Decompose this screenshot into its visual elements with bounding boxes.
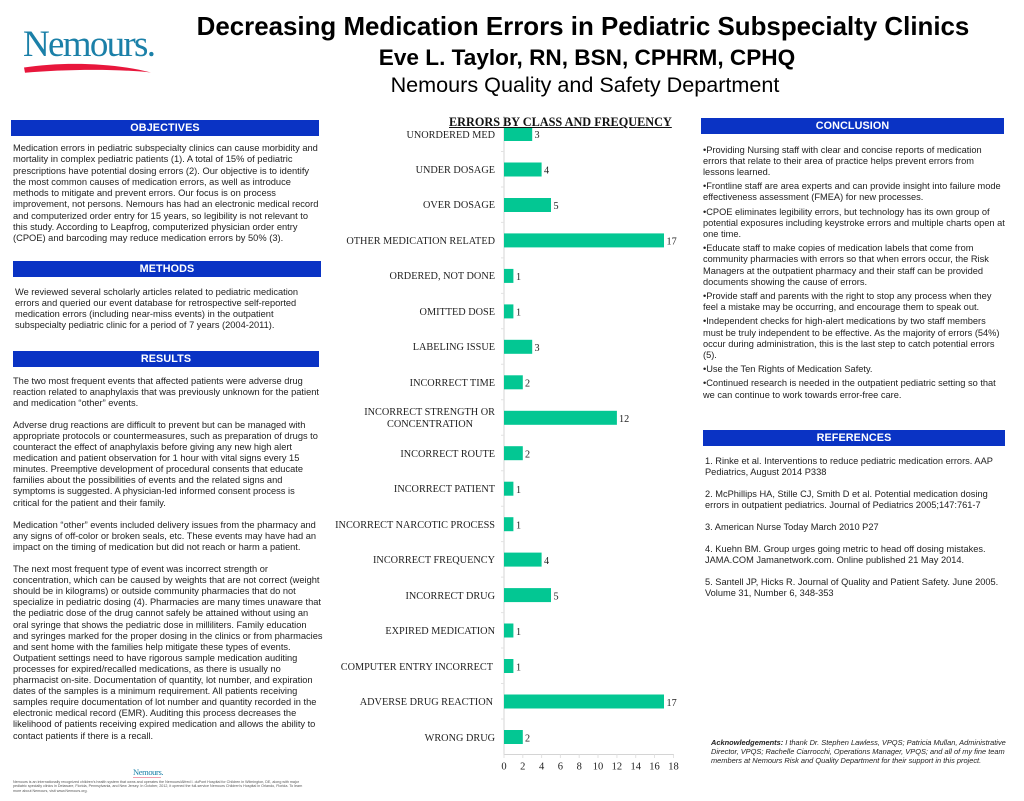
text: results: contact patients if there is a recall. xyxy=(13,730,153,740)
category labels: INCORRECT FREQUENCY xyxy=(373,555,496,566)
logo: Nemours: Nemours. xyxy=(23,24,154,65)
heading: conclusion xyxy=(701,118,1004,134)
text: results: specialize in pediatric dosing (4). Pharmacies are many times unaware that xyxy=(13,597,321,607)
text: methods: subspecialty pediatric clinic for a period of 7 years (2004-2011). xyxy=(15,320,274,330)
text: footer: pediatric specialty clinics in Delaware, Florida, Pennsylvania, and New Jersey. In October, 2012, it opened the full-service Nemours Children's Hospital in Orlando, Florida. To learn xyxy=(13,784,302,788)
category labels: WRONG DRUG xyxy=(425,733,496,744)
text: conclusion: •CPOE eliminates legibility errors, but technology has its own group of xyxy=(703,207,990,217)
text: conclusion: (5). xyxy=(703,350,717,360)
text: objectives: and computerized order entry for 15 years, so legibility is not relevant to xyxy=(13,211,308,221)
text: conclusion: occur during administration, this is the last step to catch potential errors xyxy=(703,339,995,349)
text: results: families about the possibilities of events and the related signs and xyxy=(13,475,282,485)
text: results: critical for the patient and their family. xyxy=(13,498,166,508)
text: conclusion: one time. xyxy=(703,229,741,239)
heading: results xyxy=(13,351,319,367)
text: acknowledgements: members at Nemours Risk and Quality Department for their support in this project. xyxy=(711,756,981,765)
category labels: INCORRECT DRUG xyxy=(405,591,496,602)
text: objectives: the most common causes of medication errors, as well as introduce xyxy=(13,177,291,187)
value labels: 1 xyxy=(516,662,521,674)
text: results: The next most frequent type of event was incorrect strength or xyxy=(13,564,268,574)
x axis labels xyxy=(501,762,679,772)
department: Nemours Quality and Safety Department xyxy=(391,72,779,97)
text: conclusion: lessons learned. xyxy=(703,167,770,177)
value labels: 1 xyxy=(516,485,521,496)
category labels: INCORRECT NARCOTIC PROCESS xyxy=(335,520,495,531)
text: references: 2. McPhillips HA, Stille CJ, Smith D et al. Potential medication dosing xyxy=(705,488,988,498)
category labels: CONCENTRATION xyxy=(387,419,474,430)
category labels: OMITTED DOSE xyxy=(420,307,495,318)
text: methods xyxy=(15,287,298,330)
heading: references: REFERENCES xyxy=(817,432,891,444)
text: results: concentration, which can be caused by weights that are not correct (weight xyxy=(13,575,319,585)
text: objectives: mortality in complex pediatric patients (1). A total of 15% of pediatric xyxy=(13,154,293,164)
text: results: and medication “other” events. xyxy=(13,398,138,408)
x axis labels: 10 xyxy=(593,762,603,772)
text: footer xyxy=(13,780,302,793)
text: results: likelihood of patients receiving expired medication and allows the ability to xyxy=(13,719,315,729)
author: Eve L. Taylor, RN, BSN, CPHRM, CPHQ xyxy=(379,45,795,70)
value labels: 3 xyxy=(534,130,540,141)
text: results: counteract the effect of anaphylaxis before giving any new high alert xyxy=(13,442,292,452)
text: conclusion: •Continued research is needed in the outpatient pediatric setting so that xyxy=(703,378,996,388)
text: results: symptoms is suggested. A physician-led informed consent process is xyxy=(13,486,295,496)
value labels: 17 xyxy=(666,698,677,709)
text: references xyxy=(705,456,998,598)
text: results: minutes. Preemptive development of procedural consents that educate xyxy=(13,464,303,474)
value labels: 17 xyxy=(666,236,677,248)
category labels: OTHER MEDICATION RELATED xyxy=(346,236,495,247)
text: objectives: improvement, not persons. Nemours has had an electronic medical record xyxy=(13,199,318,209)
x axis labels: 12 xyxy=(612,762,622,772)
bar chart: errors by class and frequency xyxy=(335,115,679,772)
text: results: any signs of off-color or broken seals, etc. These events may have had an xyxy=(13,531,316,541)
category labels: UNORDERED MED xyxy=(406,130,495,141)
category labels: ORDERED, NOT DONE xyxy=(390,271,495,282)
chart title: ERRORS BY CLASS AND FREQUENCY xyxy=(449,115,672,129)
category labels: EXPIRED MEDICATION xyxy=(385,626,496,637)
x axis labels: 8 xyxy=(577,762,582,772)
value labels: 5 xyxy=(554,201,559,212)
value labels: 2 xyxy=(525,734,530,744)
text: results: should be in kilograms) or outside community pharmacies that do not xyxy=(13,586,296,596)
value labels xyxy=(516,130,677,744)
text: objectives: prescriptions have potential dosing errors (2). Our objective is to identify xyxy=(13,166,309,176)
text: references: JAMA.COM Jamanetwork.com. Online published 21 May 2014. xyxy=(705,554,964,564)
value labels: 12 xyxy=(619,414,629,425)
x axis labels: 18 xyxy=(668,762,679,772)
text: conclusion: effectiveness assessment (FMEA) for new processes. xyxy=(703,192,923,202)
text: acknowledgements: Acknowledgements: I thank Dr. Stephen Lawless, VPQS; Patricia Mullan, Administrative xyxy=(711,738,1006,747)
x axis labels: 6 xyxy=(558,762,563,772)
category labels xyxy=(335,130,496,744)
title: Decreasing Medication Errors in Pediatric Subspecialty Clinics xyxy=(197,13,969,41)
heading: references xyxy=(703,430,1005,446)
text: references: 4. Kuehn BM. Group urges going metric to head off dosing mistakes. xyxy=(705,544,986,554)
text: objectives: methods to mitigate and prevent errors. Our focus is on process xyxy=(13,188,276,198)
text: conclusion: Managers at the outpatient pharmacy and their staff can be provided xyxy=(703,266,983,276)
x axis labels: 0 xyxy=(501,762,507,772)
category labels: LABELING ISSUE xyxy=(413,342,495,353)
text: objectives xyxy=(13,143,318,243)
text: results: impact on the timing of medication but did not reach or harm a patient. xyxy=(13,542,300,552)
text: results: Outpatient settings need to have rigorous sample medication auditing xyxy=(13,653,297,663)
value labels: 5 xyxy=(554,592,559,602)
text: results: oral syringe that shows the pediatric dose in milliliters. Family education xyxy=(13,620,307,630)
text: results: reaction related to anaphylaxis that was previously unknown for the patient xyxy=(13,387,319,397)
x axis labels: 14 xyxy=(630,762,642,772)
text: results: Medication “other” events included delivery issues from the pharmacy and xyxy=(13,520,316,530)
text: conclusion: •Frontline staff are area experts and can provide insight into failure mode xyxy=(703,181,1001,191)
category labels: ADVERSE DRUG REACTION xyxy=(360,697,494,708)
heading: methods: METHODS xyxy=(140,263,194,275)
text: references: 3. American Nurse Today March 2010 P27 xyxy=(705,522,879,532)
text: conclusion: •Provide staff and parents with the right to stop any process when they xyxy=(703,291,991,301)
text: conclusion: feel a mistake may be occurring, and encourage them to speak out. xyxy=(703,302,979,312)
text: conclusion: must be truly independent to be effective. As the majority of errors (54%) xyxy=(703,328,1000,338)
heading: conclusion: CONCLUSION xyxy=(816,120,889,132)
value labels: 1 xyxy=(516,308,521,318)
text: conclusion: •Educate staff to make copies of medication labels that come from xyxy=(703,243,973,253)
x axis labels: 2 xyxy=(520,762,525,772)
text: objectives: this study. According to Leapfrog, computerized physician order entry xyxy=(13,222,298,232)
text: results: and syringes marked for the proper dosing in the clinics or from pharmacies xyxy=(13,631,323,641)
text: methods: We reviewed several scholarly articles related to pediatric medication xyxy=(15,287,298,297)
text: conclusion: community pharmacies with errors so that when errors occur, the Risk xyxy=(703,254,989,264)
text: results: the pediatric dose of the drug cannot safely be attained without using an xyxy=(13,608,308,618)
text: results: dates of the samples is a minimum requirement. All patients receiving xyxy=(13,686,297,696)
text: references: Pediatrics, August 2014 P338 xyxy=(705,466,826,476)
value labels: 4 xyxy=(544,166,549,176)
text: references: 1. Rinke et al. Interventions to reduce pediatric medication errors. AAP xyxy=(705,456,993,466)
value labels: 3 xyxy=(534,343,540,354)
text: objectives: (CPOE) and barcoding may reduce medication errors by 50% (3). xyxy=(13,233,283,243)
value labels: 1 xyxy=(516,520,521,532)
value labels: 1 xyxy=(516,627,521,638)
category labels: INCORRECT STRENGTH OR xyxy=(364,407,495,418)
text: results: electronic medical record (EMR). Auditing this process decreases the xyxy=(13,708,296,718)
heading: methods xyxy=(13,261,321,277)
bars xyxy=(504,127,664,744)
category labels: INCORRECT TIME xyxy=(410,378,495,389)
text: results: medication and patient observation for 1 hour with vital signs every 15 xyxy=(13,453,299,463)
text: footer: Nemours is an internationally recognized children's health system that owns and operates the Nemours/Alfred I. duPont Hospital for Children in Wilmington, DE, along with major xyxy=(13,780,299,784)
text: conclusion: •Use the Ten Rights of Medication Safety. xyxy=(703,364,872,374)
category labels: OVER DOSAGE xyxy=(423,200,495,211)
heading: results: RESULTS xyxy=(141,353,191,365)
value labels: 1 xyxy=(516,272,521,283)
text: results: Adverse drug reactions are difficult to prevent but can be managed with xyxy=(13,420,305,430)
text: conclusion: documents showing the cause of errors. xyxy=(703,277,867,287)
text: footer: more about Nemours, visit www.Nemours.org. xyxy=(13,789,88,793)
text: conclusion xyxy=(703,144,1005,400)
text: conclusion: •Providing Nursing staff with clear and concise reports of medication xyxy=(703,144,982,154)
text: conclusion: errors that relate to their area of practice helps prevent errors from xyxy=(703,156,974,166)
text: acknowledgements: Director, VPQS; Rachelle Ciarrocchi, Operations Manager, VPQS; and all of my fine team xyxy=(711,747,1005,756)
x axis labels: 4 xyxy=(539,762,545,772)
value labels: 4 xyxy=(544,556,549,567)
value labels: 2 xyxy=(525,450,530,460)
text: results: processes for expired/recalled medications, as there is usually no xyxy=(13,664,281,674)
text: references: 5. Santell JP, Hicks R. Journal of Quality and Patient Safety. June 2005. xyxy=(705,576,998,586)
text: results xyxy=(13,376,323,741)
text: results: pharmacist on-site. Documentation of quantity, lot number, and expiration xyxy=(13,675,313,685)
category labels: INCORRECT ROUTE xyxy=(400,449,495,460)
text: results: and sent home with the families help mitigate these types of events. xyxy=(13,642,291,652)
text: conclusion: •Independent checks for high-alert medications by two staff members xyxy=(703,316,986,326)
logo: small Nemours: Nemours. xyxy=(133,767,163,777)
text: methods: medication errors (including near-miss events) in the outpatient xyxy=(15,309,274,319)
text: acknowledgements xyxy=(710,738,1006,765)
category labels: COMPUTER ENTRY INCORRECT xyxy=(341,662,494,673)
value labels: 2 xyxy=(525,378,530,390)
x axis labels: 16 xyxy=(649,762,660,772)
category labels: INCORRECT PATIENT xyxy=(394,484,496,495)
text: conclusion: we can continue to work towards error-free care. xyxy=(703,390,901,400)
category labels: UNDER DOSAGE xyxy=(416,165,495,176)
text: results: appropriate protocols or countermeasures, such as preparation of drugs to xyxy=(13,431,318,441)
text: results: The two most frequent events that affected patients were adverse drug xyxy=(13,376,303,386)
text: references: Volume 31, Number 6, 348-353 xyxy=(705,588,834,598)
text: conclusion: potential exposures including keystroke errors and multiple charts open at xyxy=(703,218,1005,228)
text: objectives: Medication errors in pediatric subspecialty clinics can cause morbidity and xyxy=(13,143,318,153)
heading: objectives xyxy=(11,120,319,136)
text: references: errors in outpatient pediatrics. Journal of Pediatrics 2005;147:761-7 xyxy=(705,500,981,510)
text: results: samples require documentation of lot number and quantity recorded in the xyxy=(13,697,316,707)
text: methods: errors and queried our event database for retrospective self-reported xyxy=(15,298,296,308)
heading: objectives: OBJECTIVES xyxy=(130,122,200,134)
